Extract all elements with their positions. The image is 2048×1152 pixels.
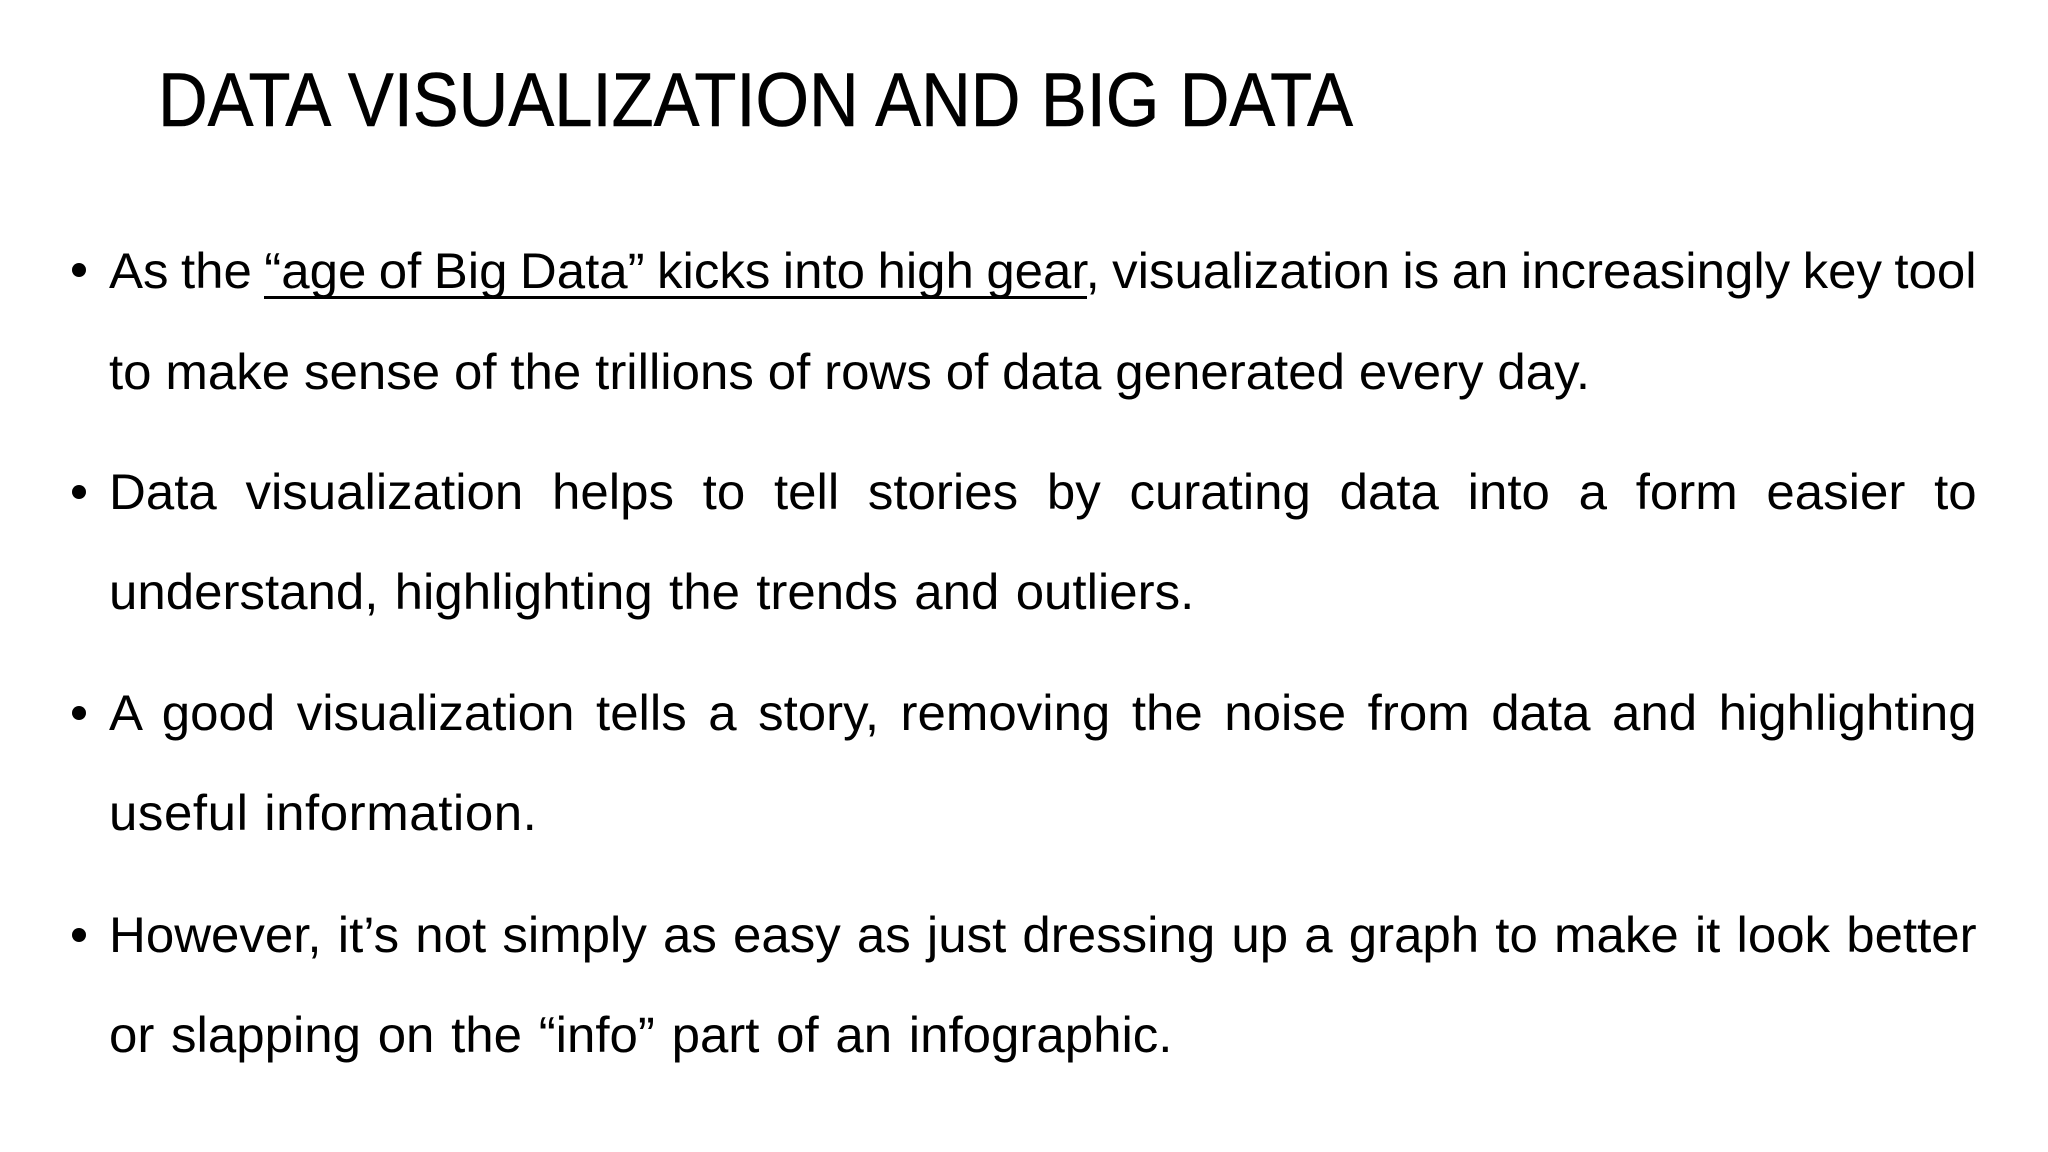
text line 1: However, it’s not simply as easy as just dressing up a graph to make it look better <box>108 907 1976 963</box>
bullet marker <box>72 485 86 499</box>
bullet marker <box>72 706 86 720</box>
title: DATA VISUALIZATION AND BIG DATA <box>158 58 1353 143</box>
bullet point 4 <box>72 907 1976 1063</box>
text line 2: or slapping on the “info” part of an infographic. <box>108 1007 1172 1063</box>
text line 2: useful information. <box>108 785 537 841</box>
text line 1: Data visualization helps to tell stories by curating data into a form easier to <box>108 464 1976 520</box>
text line 1: As the “age of Big Data” kicks into high gear, visualization is an increasingly key tool <box>108 243 1976 299</box>
bullet marker <box>72 928 86 942</box>
bullet marker <box>72 263 86 277</box>
text line 2: to make sense of the trillions of rows of data generated every day. <box>108 344 1590 400</box>
text line 2: understand, highlighting the trends and outliers. <box>108 564 1194 620</box>
underlined phrase rule <box>264 296 1087 299</box>
bullet point 1 <box>72 243 1976 400</box>
text line 1: A good visualization tells a story, removing the noise from data and highlighting <box>108 685 1976 741</box>
bullet point 3 <box>72 685 1976 841</box>
bullet point 2 <box>72 464 1976 620</box>
